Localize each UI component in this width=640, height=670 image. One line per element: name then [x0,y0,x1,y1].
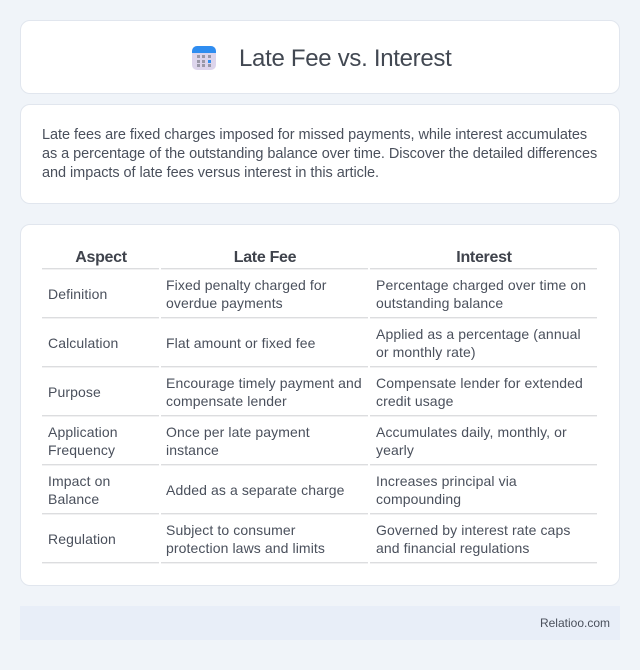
comparison table: Impact on [48,473,110,489]
comparison table: instance [166,442,219,458]
comparison table: outstanding balance [376,295,503,311]
comparison table: Percentage charged over time on [376,277,586,293]
comparison table: and financial regulations [376,540,530,556]
intro panel [20,104,620,204]
comparison table: Purpose [48,384,101,400]
icon: calendar [192,46,216,70]
comparison table: Accumulates daily, monthly, or [376,424,567,440]
comparison table: credit usage [376,393,453,409]
comparison table: yearly [376,442,414,458]
title: Late Fee vs. Interest [239,45,451,72]
intro text: Late fees are fixed charges imposed for missed payments, while interest accumulates [42,127,587,143]
comparison table: Increases principal via [376,473,517,489]
comparison table: overdue payments [166,295,283,311]
comparison table: or monthly rate) [376,344,476,360]
comparison table: Added as a separate charge [166,482,345,498]
comparison table: Encourage timely payment and [166,375,362,391]
comparison table: Compensate lender for extended [376,375,583,391]
intro text [42,127,597,181]
comparison table: protection laws and limits [166,540,325,556]
comparison table: Governed by interest rate caps [376,522,570,538]
comparison table: Balance [48,491,99,507]
comparison table: Interest [456,249,512,266]
comparison table panel [20,224,620,586]
comparison table: Applied as a percentage (annual [376,326,581,342]
intro text: as a percentage of the outstanding balance over time. Discover the detailed differences [42,146,597,162]
comparison table: Subject to consumer [166,522,296,538]
comparison table: Regulation [48,531,116,547]
comparison table: Application [48,424,118,440]
comparison table: compounding [376,491,461,507]
title card [20,20,620,94]
comparison table: compensate lender [166,393,287,409]
comparison table: Aspect [75,249,127,266]
footer [20,606,620,640]
comparison table: Flat amount or fixed fee [166,335,315,351]
comparison table: Calculation [48,335,118,351]
comparison table: Frequency [48,442,115,458]
footer brand text: Relatioo.com [540,616,610,630]
comparison table: Late Fee [234,249,296,266]
comparison table: Once per late payment [166,424,310,440]
comparison table: Fixed penalty charged for [166,277,326,293]
intro text: and impacts of late fees versus interest in this article. [42,165,379,181]
comparison table: Definition [48,286,107,302]
